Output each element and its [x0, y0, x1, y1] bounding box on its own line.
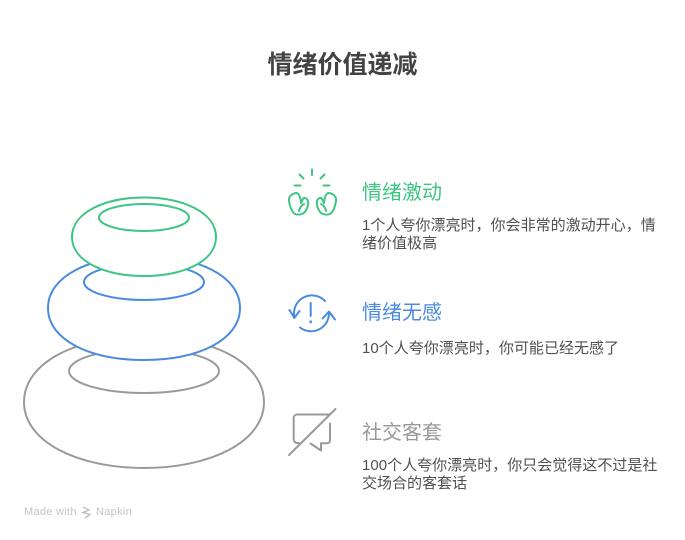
- text: 情绪激动 description: [362, 217, 656, 252]
- ring: green top: [72, 198, 216, 276]
- text: 社交客套 description: 交场合的客套话: [362, 475, 467, 492]
- watermark: Made with: [24, 506, 77, 518]
- text: 情绪激动 description: 绪价值极高: [362, 235, 437, 252]
- heading: 情绪激动: 情绪激动: [362, 182, 442, 204]
- watermark: Napkin: [96, 506, 132, 518]
- title: 情绪价值递减: [267, 51, 418, 79]
- text: 社交客套 description: 100个人夸你漂亮时，你只会觉得这不过是社: [362, 457, 657, 474]
- text: 情绪激动 description: 1个人夸你漂亮时，你会非常的激动开心，情: [362, 217, 656, 234]
- watermark: [24, 506, 132, 518]
- heading: 社交客套: 社交客套: [362, 422, 442, 444]
- text: 社交客套 description: [362, 457, 657, 492]
- icon: napkin logo: [81, 506, 91, 518]
- text: 情绪无感 description: 10个人夸你漂亮时，你可能已经无感了: [362, 340, 619, 357]
- heading: 情绪无感: 情绪无感: [362, 302, 442, 324]
- ring: gray bottom: [24, 336, 264, 468]
- ring: blue middle: [48, 256, 240, 360]
